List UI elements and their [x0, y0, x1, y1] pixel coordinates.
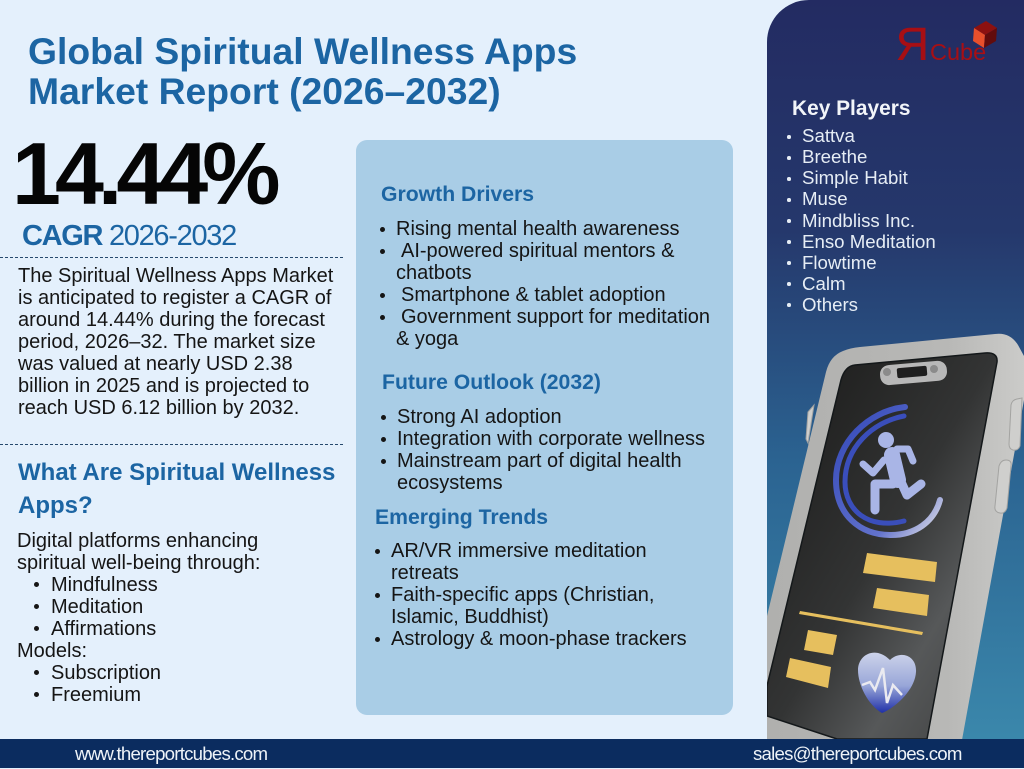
text: market summary: period, 2026–32. The market size: [18, 331, 316, 353]
list: future outlook: Strong AI adoption: [397, 406, 562, 428]
text: definition and models: Affirmations: [51, 618, 156, 640]
text: definition and models: spiritual well-being through:: [17, 552, 260, 574]
list: growth drivers: Rising mental health awareness: [396, 218, 680, 240]
text: definition and models: Models:: [17, 640, 87, 662]
logo: RCube: R: [896, 18, 929, 70]
speaker notch: [879, 360, 948, 386]
logo: RCube: [896, 18, 997, 70]
list: emerging trends: AR/VR immersive meditation: [391, 540, 647, 562]
list: growth drivers: & yoga: [396, 328, 458, 350]
list: key players: Calm: [802, 273, 846, 294]
heading: what are spiritual wellness apps: What Are Spiritual Wellness: [18, 459, 335, 486]
list: future outlook: Integration with corporate wellness: [397, 428, 705, 450]
title: Market Report (2026–2032): [28, 70, 501, 112]
footer bar: [0, 739, 1024, 768]
yellow bars: [786, 553, 937, 688]
text: definition and models: Freemium: [51, 684, 141, 706]
list: future outlook: [381, 406, 705, 494]
list: emerging trends: retreats: [391, 562, 459, 584]
text: market summary: is anticipated to register a CAGR of: [18, 287, 331, 309]
list: key players: Simple Habit: [802, 167, 908, 188]
text: market summary: The Spiritual Wellness Apps Market: [18, 265, 333, 287]
list: emerging trends: Faith-specific apps (Christian,: [391, 584, 654, 606]
heading: what are spiritual wellness apps: Apps?: [18, 492, 93, 519]
text: market summary: was valued at nearly USD 2.38: [18, 353, 293, 375]
phone body: [767, 334, 1024, 740]
list: growth drivers: AI-powered spiritual mentors &: [401, 240, 674, 262]
list: emerging trends: Astrology & moon-phase trackers: [391, 628, 687, 650]
footer: email: sales@thereportcubes.com: [753, 743, 962, 764]
text: definition and models: Meditation: [51, 596, 143, 618]
title: [28, 30, 577, 112]
heading: growth drivers: Growth Drivers: [381, 183, 534, 206]
phone side buttons: [806, 398, 1022, 513]
list: growth drivers: chatbots: [396, 262, 472, 284]
logo: RCube: Cube: [930, 39, 986, 65]
stat label: CAGR 2026-2032: CAGR 2026-2032: [22, 220, 236, 252]
text: market summary: billion in 2025 and is projected to: [18, 375, 309, 397]
list: growth drivers: Government support for meditation: [401, 306, 710, 328]
heading: what are spiritual wellness apps: [18, 459, 335, 519]
list: future outlook: Mainstream part of digital health: [397, 450, 682, 472]
list: key players: Flowtime: [802, 252, 877, 273]
icon: runner in ring: [836, 407, 940, 535]
heading: future outlook: Future Outlook (2032): [382, 371, 601, 394]
list: growth drivers: [380, 218, 710, 350]
heading: emerging trends: Emerging Trends: [375, 506, 548, 529]
list: key players: Muse: [802, 188, 848, 209]
right panel background: [767, 0, 1024, 768]
panel: center insights: [356, 140, 733, 715]
icon: heart: [858, 653, 916, 713]
text: market summary: [18, 265, 334, 419]
phone illustration: [767, 334, 1024, 739]
list: key players: Enso Meditation: [802, 231, 936, 252]
text: definition and models: Digital platforms enhancing: [17, 530, 258, 552]
list: key players: Sattva: [802, 125, 855, 146]
phone screen: [767, 353, 997, 739]
list: growth drivers: Smartphone & tablet adoption: [401, 284, 666, 306]
text: definition and models: Mindfulness: [51, 574, 158, 596]
list: emerging trends: Islamic, Buddhist): [391, 606, 549, 628]
list: key players: Mindbliss Inc.: [802, 210, 915, 231]
list: future outlook: ecosystems: [397, 472, 503, 494]
list: key players: [787, 125, 936, 315]
text: market summary: reach USD 6.12 billion by 2032.: [18, 397, 299, 419]
list: key players: Breethe: [802, 146, 867, 167]
footer: website: www.thereportcubes.com: [75, 743, 267, 764]
title: Global Spiritual Wellness Apps: [28, 30, 577, 72]
text: definition and models: Subscription: [51, 662, 161, 684]
big stat: 14.44%: 14.44%: [12, 124, 274, 223]
list: key players: Others: [802, 294, 858, 315]
text: definition and models: [17, 530, 260, 706]
text: market summary: around 14.44% during the forecast: [18, 309, 325, 331]
heading: key players: Key Players: [792, 97, 910, 120]
list: emerging trends: [375, 540, 687, 650]
